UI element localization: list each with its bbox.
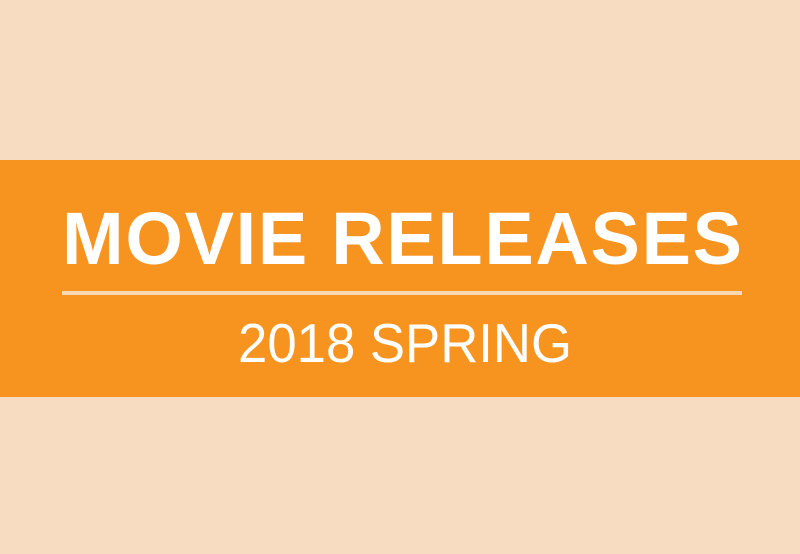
banner: orange band xyxy=(0,160,800,397)
title: MOVIE RELEASES xyxy=(62,197,742,280)
divider line xyxy=(62,291,742,295)
subtitle: 2018 SPRING xyxy=(238,312,572,374)
